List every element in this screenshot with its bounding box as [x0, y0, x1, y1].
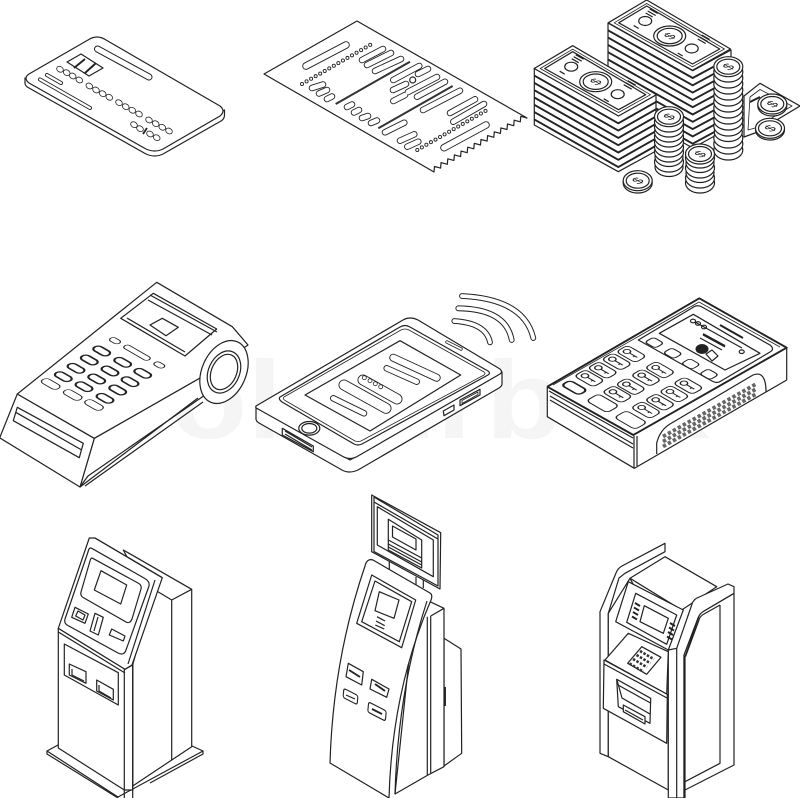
middle coin stack: $	[659, 111, 679, 122]
kiosk side body	[123, 550, 192, 786]
phone screen bars	[333, 358, 437, 413]
device keypad	[561, 345, 703, 430]
wireless signal arcs	[454, 296, 533, 342]
phone side	[256, 372, 502, 472]
tall coin stack	[714, 57, 743, 160]
small loose banknote	[744, 83, 800, 137]
kiosk curved front	[330, 560, 432, 798]
ATM right pillar and side panel	[668, 584, 734, 798]
loose coins on banknote: $	[760, 122, 780, 134]
front coin stack	[686, 144, 714, 193]
phone speaker	[447, 342, 461, 349]
icon: card payment terminal with paper roll	[0, 282, 258, 487]
card chip	[67, 54, 103, 76]
kiosk screen	[357, 575, 416, 648]
ATM left pillar	[600, 543, 665, 757]
icon: ATM	[600, 543, 734, 798]
phone bezel	[279, 326, 490, 445]
monitor supports	[389, 562, 423, 588]
terminal keypad	[39, 337, 166, 412]
front banknote stack	[534, 46, 656, 172]
kiosk screen	[81, 558, 141, 623]
front coin stack: $	[690, 148, 710, 160]
loose coins on banknote	[756, 94, 787, 140]
phone ports and buttons	[282, 389, 480, 452]
receipt dotted rows	[302, 42, 490, 150]
icon: payment kiosk two with overhead monitor	[330, 495, 462, 798]
device speaker vent	[657, 374, 766, 454]
back banknote stack	[608, 0, 731, 148]
device front grooves	[549, 391, 637, 468]
terminal side and base	[80, 378, 205, 487]
single coin: $	[628, 175, 648, 186]
terminal top face	[17, 282, 248, 438]
terminal slanted front	[0, 394, 94, 487]
icon: payment kiosk one	[47, 538, 203, 798]
icon: handheld payment device	[547, 298, 787, 468]
card holder name bars	[40, 75, 90, 108]
kiosk card slots	[72, 607, 125, 641]
kiosk side	[395, 602, 445, 794]
icon: smartphone with wireless signal	[256, 296, 533, 472]
card number ovals	[56, 65, 173, 142]
back banknote stack: $	[660, 30, 680, 42]
kiosk rear box	[444, 638, 462, 766]
terminal display	[121, 293, 217, 356]
terminal paper roll	[190, 333, 258, 411]
icon: receipt	[264, 21, 527, 172]
kiosk lower panel	[64, 644, 118, 705]
phone screen	[305, 341, 461, 431]
card signature stripe	[98, 49, 149, 77]
kiosk head inner panel	[65, 548, 149, 654]
ATM cash dispenser box	[603, 660, 667, 743]
device top edges	[547, 298, 787, 435]
ATM keypad shelf	[605, 633, 668, 694]
kiosk front body	[58, 628, 133, 790]
device screen housing	[638, 306, 772, 382]
phone home button	[299, 422, 320, 435]
kiosk base	[47, 745, 203, 798]
device body	[547, 298, 787, 468]
icon: money stacks and coins	[534, 0, 800, 193]
ATM screen housing	[616, 582, 683, 650]
tall coin stack: $	[719, 61, 739, 72]
phone body	[256, 318, 502, 458]
background watermark: colourbox	[100, 339, 710, 462]
overhead monitor	[372, 495, 441, 589]
middle coin stack	[654, 107, 684, 176]
kiosk slots	[343, 663, 389, 721]
kiosk tilted head	[58, 538, 162, 673]
loose coins on banknote: $	[763, 98, 783, 110]
single coin	[623, 171, 652, 193]
receipt text bars	[306, 45, 486, 148]
icon: credit card	[25, 37, 224, 156]
front banknote stack: $	[586, 76, 606, 87]
ATM lower body	[608, 578, 668, 790]
receipt dividers	[336, 62, 453, 128]
ATM top	[630, 557, 717, 610]
